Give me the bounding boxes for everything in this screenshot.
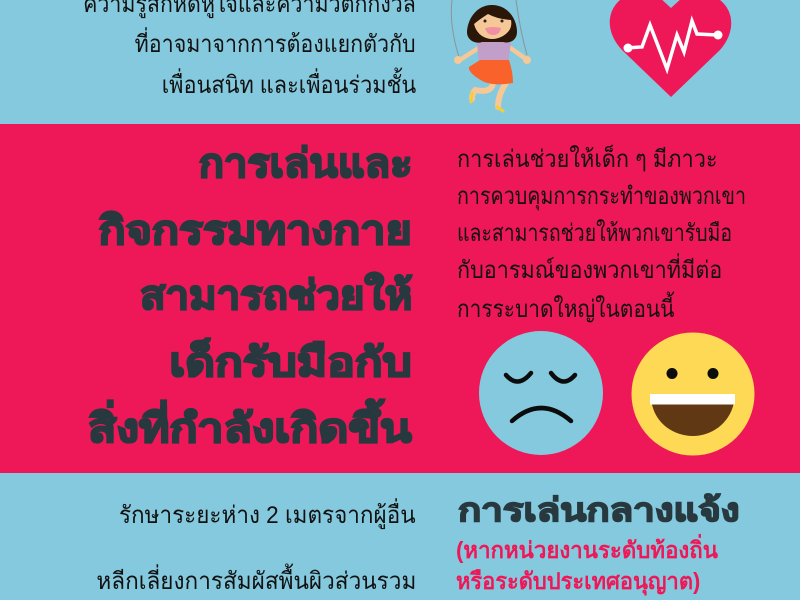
icon: girl jumping rope xyxy=(450,0,531,113)
heading: play and physical activity help children cope: เด็กรับมือกับ xyxy=(170,341,412,385)
panel: pink middle section xyxy=(0,124,800,473)
text block: if local or national authorities permit xyxy=(456,534,718,596)
heading: outdoor play: การเล่นกลางแจ้ง xyxy=(458,492,739,528)
heading: play and physical activity help children cope xyxy=(88,142,413,451)
panel: top blue section xyxy=(0,0,800,124)
text block: play helps children: การเล่นช่วยให้เด็ก ๆ มีภาวะ xyxy=(457,146,718,173)
icon: happy face xyxy=(632,332,754,456)
icon: sad face xyxy=(479,331,603,455)
text block: feelings of sadness and worry: ที่อาจมาจากการต้องแยกตัวกับ xyxy=(135,31,416,58)
heading: play and physical activity help children cope: การเล่นและ xyxy=(198,142,412,186)
text block: play helps children xyxy=(457,144,746,323)
icon: heart with heartbeat line xyxy=(610,0,732,97)
text block: feelings of sadness and worry: เพื่อนสนิท และเพื่อนร่วมชั้น xyxy=(162,72,416,99)
text block: play helps children: กับอารมณ์ของพวกเขาที่มีต่อ xyxy=(457,257,722,284)
text block: play helps children: และสามารถช่วยให้พวกเขารับมือ xyxy=(457,220,732,247)
heading: play and physical activity help children cope: สิ่งที่กำลังเกิดขึ้น xyxy=(89,407,412,451)
heading: play and physical activity help children cope: กิจกรรมทางกาย xyxy=(99,209,412,253)
text block: if local or national authorities permit: (หากหน่วยงานระดับท้องถิ่น xyxy=(456,537,718,563)
text block: if local or national authorities permit: หรือระดับประเทศอนุญาต) xyxy=(456,568,700,594)
panel: bottom blue section xyxy=(0,473,800,600)
text block: feelings of sadness and worry xyxy=(83,0,416,99)
text block: avoid shared surfaces: หลีกเลี่ยงการสัมผัสพื้นผิวส่วนรวม xyxy=(96,568,416,595)
text block: play helps children: การระบาดใหญ่ในตอนนี้ xyxy=(457,296,674,323)
heading: play and physical activity help children cope: สามารถช่วยให้ xyxy=(140,274,412,318)
text block: play helps children: การควบคุมการกระทำของพวกเขา xyxy=(457,183,746,210)
text block: keep distance: รักษาระยะห่าง 2 เมตรจากผู้อื่น xyxy=(119,502,416,529)
